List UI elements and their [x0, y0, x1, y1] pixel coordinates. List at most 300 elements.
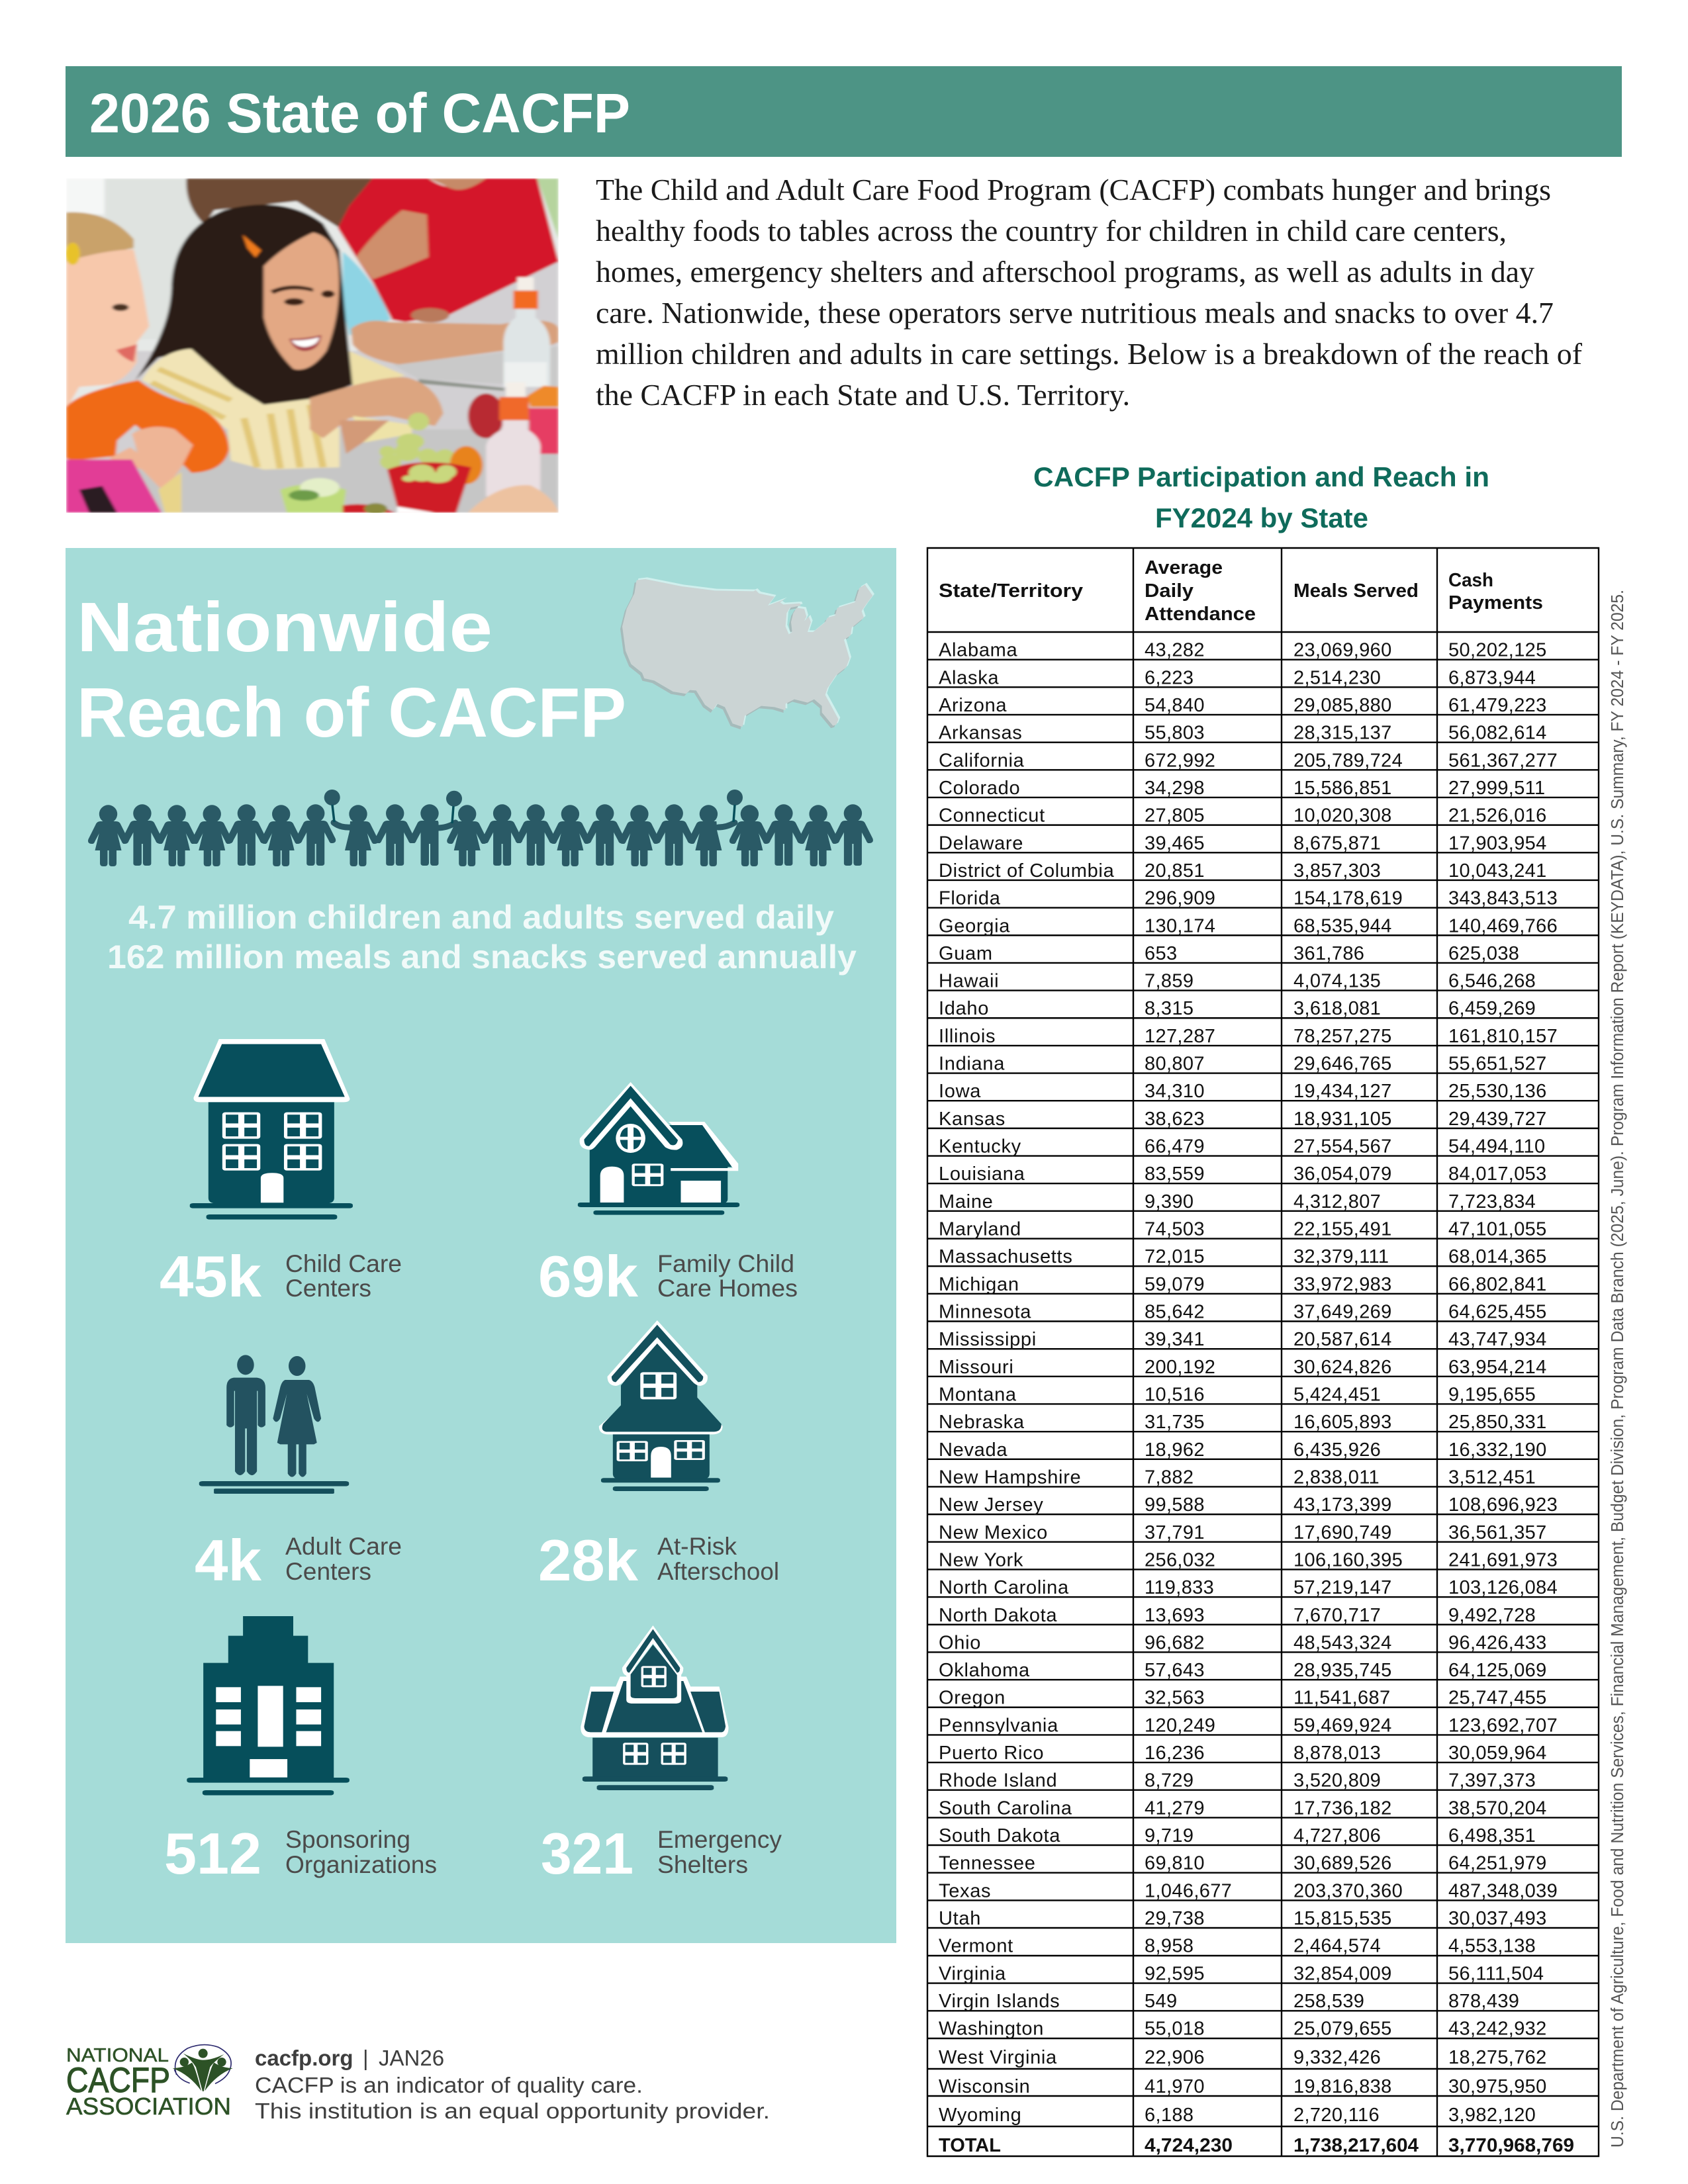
table body rows: 22,906 — [1145, 2047, 1205, 2068]
table body rows: 85,642 — [1145, 1301, 1205, 1322]
table body rows: 41,279 — [1145, 1797, 1205, 1819]
icon: afterschool house — [599, 1320, 723, 1491]
table body rows: South Dakota — [939, 1825, 1060, 1846]
table body rows: 43,173,399 — [1293, 1494, 1392, 1516]
table body rows: Louisiana — [939, 1163, 1025, 1185]
stat label: At-Risk — [657, 1532, 737, 1560]
table body rows: 25,850,331 — [1448, 1412, 1547, 1433]
table body rows: 8,675,871 — [1293, 833, 1381, 854]
table body rows: 80,807 — [1145, 1054, 1205, 1075]
table body rows: 64,125,069 — [1448, 1660, 1547, 1681]
stat label: Shelters — [657, 1850, 748, 1878]
intro paragraph: care. Nationwide, these operators serve nutritious meals and snacks to over 4.7 — [596, 296, 1554, 330]
table body rows: 43,747,934 — [1448, 1329, 1547, 1350]
table body rows: 15,815,535 — [1293, 1908, 1392, 1929]
table body rows: Vermont — [939, 1936, 1013, 1957]
source note (rotated): U.S. Department of Agriculture, Food and Nutrition Services, Financial Management, Budget Division, Program Data Branch (2025, June). Program Information Report (KEYDATA), U.S. Summary, FY 2024 - FY 2025. — [1609, 590, 1627, 2148]
table body rows: Kentucky — [939, 1136, 1021, 1157]
table body rows: 4,074,135 — [1293, 971, 1381, 992]
table body rows: Pennsylvania — [939, 1715, 1058, 1736]
table total row: 3,770,968,769 — [1448, 2135, 1574, 2156]
table body rows: 6,546,268 — [1448, 971, 1536, 992]
table body rows: Oregon — [939, 1688, 1006, 1709]
panel heading: Nationwide — [77, 588, 492, 666]
table header row: Payments — [1448, 592, 1543, 614]
icon: map of United States — [620, 577, 874, 729]
table body rows: New Jersey — [939, 1494, 1043, 1516]
table body rows: Hawaii — [939, 971, 999, 992]
table body rows: North Dakota — [939, 1605, 1057, 1626]
table body rows: 59,469,924 — [1293, 1715, 1392, 1736]
icon: emblem of three figures — [173, 2045, 233, 2091]
table body rows: 17,690,749 — [1293, 1522, 1392, 1543]
table body rows: 96,682 — [1145, 1632, 1205, 1653]
table body rows: Georgia — [939, 915, 1010, 936]
table body rows: 83,559 — [1145, 1163, 1205, 1185]
table body rows: 7,670,717 — [1293, 1605, 1381, 1626]
table body rows: 54,840 — [1145, 695, 1205, 716]
table body rows: 17,903,954 — [1448, 833, 1547, 854]
table body rows: 3,857,303 — [1293, 860, 1381, 882]
table body rows: 25,079,655 — [1293, 2019, 1392, 2040]
table body rows: 64,625,455 — [1448, 1301, 1547, 1322]
table body rows: 123,692,707 — [1448, 1715, 1558, 1736]
table body rows: 99,588 — [1145, 1494, 1205, 1516]
table body rows: 10,020,308 — [1293, 805, 1392, 827]
title text: 2026 State of CACFP — [89, 82, 630, 144]
stat label — [657, 1532, 779, 1585]
table body rows: 32,854,009 — [1293, 1963, 1392, 1984]
table body rows: 19,434,127 — [1293, 1081, 1392, 1102]
table body rows: 30,624,826 — [1293, 1357, 1392, 1378]
stat number: 28k — [538, 1527, 639, 1593]
footer text: This institution is an equal opportunity provider. — [255, 2099, 770, 2123]
table body rows: New Mexico — [939, 1522, 1048, 1543]
table body rows: Wyoming — [939, 2105, 1022, 2126]
stat: adult care centers — [195, 1355, 402, 1593]
table body rows: 32,379,111 — [1293, 1246, 1389, 1267]
table body rows: Rhode Island — [939, 1770, 1057, 1792]
icon: family home — [578, 1082, 739, 1215]
stat label: Organizations — [285, 1850, 437, 1878]
icon: two adults standing — [199, 1355, 349, 1494]
intro paragraph — [596, 173, 1583, 412]
stat label: Emergency — [657, 1825, 782, 1853]
stat label: Sponsoring — [285, 1825, 410, 1853]
table body rows: 27,554,567 — [1293, 1136, 1392, 1157]
table header row: Meals Served — [1293, 580, 1419, 602]
table body rows: 72,015 — [1145, 1246, 1205, 1267]
panel heading — [77, 588, 626, 752]
table body rows: 7,723,834 — [1448, 1191, 1536, 1212]
footer logo: National CACFP Association — [66, 2045, 233, 2120]
table body rows: Massachusetts — [939, 1246, 1073, 1267]
table body rows: 21,526,016 — [1448, 805, 1547, 827]
footer text: CACFP is an indicator of quality care. — [255, 2073, 643, 2097]
table body rows: 50,202,125 — [1448, 640, 1547, 661]
table body rows: 625,038 — [1448, 943, 1519, 964]
stat label — [285, 1825, 437, 1878]
table body rows: 3,618,081 — [1293, 998, 1381, 1019]
table body rows: 39,465 — [1145, 833, 1205, 854]
table body rows: Washington — [939, 2019, 1044, 2040]
table body rows: Missouri — [939, 1357, 1014, 1378]
stat: child care centers — [160, 1039, 402, 1309]
table body rows: 205,789,724 — [1293, 750, 1403, 771]
table body rows: Texas — [939, 1880, 991, 1901]
table body rows: 78,257,275 — [1293, 1026, 1392, 1047]
table body rows: 5,424,451 — [1293, 1385, 1381, 1406]
table body rows: 120,249 — [1145, 1715, 1215, 1736]
table body rows: 4,553,138 — [1448, 1936, 1536, 1957]
table body rows: 361,786 — [1293, 943, 1364, 964]
stat: sponsoring organizations — [164, 1616, 437, 1886]
table body rows: 16,332,190 — [1448, 1439, 1547, 1461]
table body rows: 59,079 — [1145, 1274, 1205, 1295]
table body rows: 29,439,727 — [1448, 1109, 1547, 1130]
stat number: 45k — [160, 1244, 262, 1309]
table body rows: 561,367,277 — [1448, 750, 1558, 771]
table heading — [1033, 461, 1489, 533]
footer text: | — [363, 2046, 369, 2070]
footer logo: National CACFP Association: CACFP — [66, 2061, 170, 2100]
table body rows: 8,729 — [1145, 1770, 1194, 1792]
table body rows: 15,586,851 — [1293, 778, 1392, 799]
table body rows: 1,046,677 — [1145, 1880, 1232, 1901]
table body rows: Oklahoma — [939, 1660, 1030, 1681]
table body rows: 57,219,147 — [1293, 1577, 1392, 1598]
table body rows: 154,178,619 — [1293, 888, 1403, 909]
table body rows: 13,693 — [1145, 1605, 1205, 1626]
table body rows: 3,512,451 — [1448, 1467, 1536, 1488]
table body rows: 68,014,365 — [1448, 1246, 1547, 1267]
stat label: Care Homes — [657, 1274, 798, 1302]
table body rows: 343,843,513 — [1448, 888, 1558, 909]
table body rows: 61,479,223 — [1448, 695, 1547, 716]
table body rows: 63,954,214 — [1448, 1357, 1547, 1378]
table body rows: Iowa — [939, 1081, 981, 1102]
intro paragraph: The Child and Adult Care Food Program (CACFP) combats hunger and brings — [596, 173, 1551, 206]
table header row — [939, 557, 1543, 625]
footer text: JAN26 — [379, 2046, 444, 2070]
title banner — [66, 66, 1622, 157]
table body rows: Alaska — [939, 667, 999, 688]
table body rows: 9,390 — [1145, 1191, 1194, 1212]
table body rows: 653 — [1145, 943, 1177, 964]
table body rows: Connecticut — [939, 805, 1045, 827]
table body rows: 36,054,079 — [1293, 1163, 1392, 1185]
stat label: Afterschool — [657, 1557, 779, 1585]
icon: child care center building — [190, 1039, 353, 1220]
table body rows: 6,223 — [1145, 667, 1194, 688]
table header row: Cash — [1448, 570, 1493, 591]
table body rows: 28,315,137 — [1293, 723, 1392, 744]
table body rows: Idaho — [939, 998, 989, 1019]
intro paragraph: million children and adults in care settings. Below is a breakdown of the reach of — [596, 337, 1583, 371]
table body rows: California — [939, 750, 1025, 771]
table body rows: Tennessee — [939, 1853, 1036, 1874]
table body rows: 47,101,055 — [1448, 1219, 1547, 1240]
table body rows: 31,735 — [1145, 1412, 1205, 1433]
stat number: 69k — [538, 1244, 639, 1309]
table body rows: 20,587,614 — [1293, 1329, 1392, 1350]
table body rows: 16,605,893 — [1293, 1412, 1392, 1433]
reach statistics: 4.7 million children and adults served daily — [128, 899, 834, 936]
table body rows: 3,520,809 — [1293, 1770, 1381, 1792]
table body rows: 18,275,762 — [1448, 2047, 1547, 2068]
table body rows: 39,341 — [1145, 1329, 1205, 1350]
table body rows: 92,595 — [1145, 1963, 1205, 1984]
stat: emergency shelters — [541, 1625, 782, 1886]
table body rows: 55,651,527 — [1448, 1054, 1547, 1075]
table body rows: Indiana — [939, 1054, 1005, 1075]
table body rows: 22,155,491 — [1293, 1219, 1392, 1240]
table body rows: 48,543,324 — [1293, 1632, 1392, 1653]
table body rows: Montana — [939, 1385, 1017, 1406]
table body rows: 200,192 — [1145, 1357, 1215, 1378]
table body rows: 33,972,983 — [1293, 1274, 1392, 1295]
table body rows: Virgin Islands — [939, 1991, 1060, 2012]
stat number: 4k — [195, 1527, 262, 1593]
table body rows: Ohio — [939, 1632, 981, 1653]
table body rows: 4,312,807 — [1293, 1191, 1381, 1212]
table body rows: 161,810,157 — [1448, 1026, 1558, 1047]
table body rows: 130,174 — [1145, 915, 1215, 936]
table body rows: 127,287 — [1145, 1026, 1215, 1047]
table body rows: 30,689,526 — [1293, 1853, 1392, 1874]
icon: office building — [187, 1616, 350, 1796]
table body rows: 18,962 — [1145, 1439, 1205, 1461]
table body rows: 17,736,182 — [1293, 1797, 1392, 1819]
table total row — [939, 2135, 1574, 2156]
table body rows: 258,539 — [1293, 1991, 1364, 2012]
table body rows: Mississippi — [939, 1329, 1037, 1350]
table body rows: 9,492,728 — [1448, 1605, 1536, 1626]
table body rows: 37,791 — [1145, 1522, 1205, 1543]
table body rows: Guam — [939, 943, 993, 964]
table body rows: 20,851 — [1145, 860, 1205, 882]
table header row: Average — [1145, 557, 1223, 578]
table body rows: Florida — [939, 888, 1001, 909]
table body rows: 2,720,116 — [1293, 2105, 1380, 2126]
table body rows: 38,570,204 — [1448, 1797, 1547, 1819]
table body rows: 4,727,806 — [1293, 1825, 1381, 1846]
table body rows: Nevada — [939, 1439, 1008, 1461]
table body rows: 43,242,932 — [1448, 2019, 1547, 2040]
table body rows: 30,037,493 — [1448, 1908, 1547, 1929]
table body rows: 6,459,269 — [1448, 998, 1536, 1019]
icon: shelter house — [581, 1625, 729, 1790]
footer text: cacfp.org — [255, 2046, 353, 2070]
intro paragraph: homes, emergency shelters and afterschool programs, as well as adults in day — [596, 255, 1534, 289]
table body rows: 30,059,964 — [1448, 1743, 1547, 1764]
table body rows: 7,397,373 — [1448, 1770, 1536, 1792]
table body rows: Alabama — [939, 640, 1018, 661]
footer logo: National CACFP Association: ASSOCIATION — [66, 2093, 231, 2120]
table body rows: 54,494,110 — [1448, 1136, 1545, 1157]
table body rows: 56,111,504 — [1448, 1963, 1544, 1984]
table body rows: Maine — [939, 1191, 993, 1212]
table body rows: 103,126,084 — [1448, 1577, 1558, 1598]
table body rows: Minnesota — [939, 1301, 1031, 1322]
table body rows: 29,646,765 — [1293, 1054, 1392, 1075]
table body rows: 30,975,950 — [1448, 2076, 1547, 2097]
table body rows: 296,909 — [1145, 888, 1215, 909]
table body rows: 34,310 — [1145, 1081, 1205, 1102]
stat label: Child Care — [285, 1250, 402, 1277]
table body rows: 10,516 — [1145, 1385, 1205, 1406]
table body rows: Wisconsin — [939, 2076, 1030, 2097]
table body rows: 11,541,687 — [1293, 1688, 1390, 1709]
footer text — [255, 2046, 770, 2123]
table body rows: 66,802,841 — [1448, 1274, 1547, 1295]
table body rows: 55,803 — [1145, 723, 1205, 744]
table body rows: 96,426,433 — [1448, 1632, 1547, 1653]
reach statistics: 162 million meals and snacks served annually — [107, 938, 857, 976]
table body rows: 43,282 — [1145, 640, 1205, 661]
table body rows: 241,691,973 — [1448, 1549, 1558, 1570]
stat label — [657, 1250, 798, 1302]
table body rows: 487,348,039 — [1448, 1880, 1558, 1901]
table body rows: West Virginia — [939, 2047, 1057, 2068]
table body rows: 29,738 — [1145, 1908, 1205, 1929]
table body rows: 7,859 — [1145, 971, 1194, 992]
table body rows: Maryland — [939, 1219, 1021, 1240]
stat label: Family Child — [657, 1250, 794, 1277]
table header row: State/Territory — [939, 580, 1083, 602]
stat: at-risk afterschool — [538, 1320, 779, 1593]
table body rows: 84,017,053 — [1448, 1163, 1547, 1185]
table body rows: 56,082,614 — [1448, 723, 1547, 744]
table body rows: Delaware — [939, 833, 1023, 854]
table total row: 1,738,217,604 — [1293, 2135, 1419, 2156]
table body rows: 549 — [1145, 1991, 1177, 2012]
table heading: FY2024 by State — [1155, 502, 1368, 533]
table body rows: 69,810 — [1145, 1853, 1205, 1874]
stat label — [285, 1532, 402, 1585]
reach statistics — [107, 899, 857, 976]
table body rows: 64,251,979 — [1448, 1853, 1547, 1874]
stat label: Adult Care — [285, 1532, 402, 1560]
table body rows: 25,747,455 — [1448, 1688, 1547, 1709]
table body rows: Illinois — [939, 1026, 996, 1047]
table body rows: New York — [939, 1549, 1023, 1570]
table body rows: 9,332,426 — [1293, 2047, 1381, 2068]
panel: nationwide reach — [66, 548, 896, 1943]
table grid — [927, 548, 1599, 2156]
table body rows: 8,878,013 — [1293, 1743, 1381, 1764]
table body rows: 6,188 — [1145, 2105, 1194, 2126]
table body rows: 18,931,105 — [1293, 1109, 1392, 1130]
table body rows: 6,873,944 — [1448, 667, 1536, 688]
table heading: CACFP Participation and Reach in — [1033, 461, 1489, 492]
panel heading: Reach of CACFP — [77, 674, 626, 752]
table body rows: 36,561,357 — [1448, 1522, 1547, 1543]
table body rows: Nebraska — [939, 1412, 1025, 1433]
table body rows: 27,999,511 — [1448, 778, 1545, 799]
table body rows: 108,696,923 — [1448, 1494, 1558, 1516]
stat label — [657, 1825, 782, 1878]
table body rows: Utah — [939, 1908, 981, 1929]
stat number: 321 — [541, 1821, 633, 1886]
photo: children eating at a table — [66, 178, 559, 514]
stat label: Centers — [285, 1557, 371, 1585]
table body rows: Colorado — [939, 778, 1020, 799]
table body rows: 203,370,360 — [1293, 1880, 1403, 1901]
table body rows: Arizona — [939, 695, 1007, 716]
table body rows: 41,970 — [1145, 2076, 1205, 2097]
table body rows: 10,043,241 — [1448, 860, 1547, 882]
table body rows: 34,298 — [1145, 778, 1205, 799]
stat number: 512 — [164, 1821, 261, 1886]
table body rows: 878,439 — [1448, 1991, 1519, 2012]
table body rows: 55,018 — [1145, 2019, 1205, 2040]
stat label — [285, 1250, 402, 1302]
table body rows: 19,816,838 — [1293, 2076, 1392, 2097]
table body rows: North Carolina — [939, 1577, 1069, 1598]
table body rows: New Hampshire — [939, 1467, 1081, 1488]
stat label: Centers — [285, 1274, 371, 1302]
intro paragraph: the CACFP in each State and U.S. Territory. — [596, 378, 1130, 412]
table body rows — [939, 640, 1558, 2126]
table body rows: 6,435,926 — [1293, 1439, 1381, 1461]
table body rows: 119,833 — [1145, 1577, 1214, 1598]
table body rows: South Carolina — [939, 1797, 1072, 1819]
table body rows: 23,069,960 — [1293, 640, 1392, 661]
table body rows: 2,464,574 — [1293, 1936, 1381, 1957]
footer logo: National CACFP Association: NATIONAL — [66, 2045, 169, 2066]
table body rows: 7,882 — [1145, 1467, 1194, 1488]
stat: family child care homes — [538, 1082, 798, 1309]
table body rows: 28,935,745 — [1293, 1660, 1392, 1681]
table body rows: 6,498,351 — [1448, 1825, 1536, 1846]
table body rows: 256,032 — [1145, 1549, 1215, 1570]
table body rows: 8,315 — [1145, 998, 1194, 1019]
table body rows: 2,514,230 — [1293, 667, 1381, 688]
table body rows: 25,530,136 — [1448, 1081, 1547, 1102]
table body rows: Arkansas — [939, 723, 1022, 744]
table body rows: Michigan — [939, 1274, 1019, 1295]
table body rows: 32,563 — [1145, 1688, 1205, 1709]
table body rows: 106,160,395 — [1293, 1549, 1403, 1570]
table body rows: 8,958 — [1145, 1936, 1194, 1957]
table body rows: 9,719 — [1145, 1825, 1194, 1846]
table header row: Attendance — [1145, 604, 1256, 625]
table body rows: 140,469,766 — [1448, 915, 1558, 936]
table body rows: 9,195,655 — [1448, 1385, 1536, 1406]
table body rows: 57,643 — [1145, 1660, 1205, 1681]
table header row: Daily — [1145, 580, 1194, 602]
table total row: 4,724,230 — [1145, 2135, 1233, 2156]
table body rows: Kansas — [939, 1109, 1006, 1130]
table body rows: 68,535,944 — [1293, 915, 1392, 936]
table body rows: 2,838,011 — [1293, 1467, 1380, 1488]
table body rows: 38,623 — [1145, 1109, 1205, 1130]
table body rows: 672,992 — [1145, 750, 1215, 771]
intro paragraph: healthy foods to tables across the country for children in child care centers, — [596, 214, 1507, 248]
table body rows: 29,085,880 — [1293, 695, 1392, 716]
table body rows: Virginia — [939, 1963, 1006, 1984]
table body rows: 66,479 — [1145, 1136, 1205, 1157]
table body rows: 37,649,269 — [1293, 1301, 1392, 1322]
icon: row of people holding hands — [88, 790, 873, 866]
table total row: TOTAL — [939, 2135, 1001, 2156]
table body rows: 3,982,120 — [1448, 2105, 1536, 2126]
table body rows: District of Columbia — [939, 860, 1115, 882]
table: participation by state — [927, 548, 1599, 2156]
table body rows: Puerto Rico — [939, 1743, 1044, 1764]
table body rows: 74,503 — [1145, 1219, 1205, 1240]
